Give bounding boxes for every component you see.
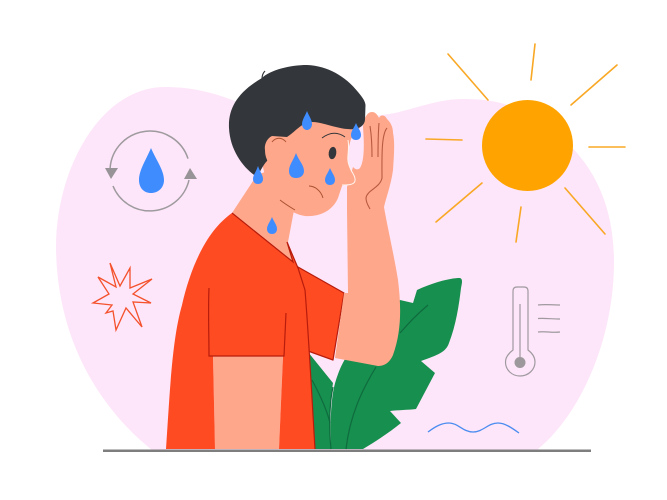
background blob xyxy=(56,87,614,450)
nose highlight xyxy=(342,140,355,185)
leaf veins xyxy=(312,305,428,449)
icon: sun xyxy=(426,44,625,242)
big leaf xyxy=(331,278,462,449)
eye xyxy=(328,146,337,160)
icon: water cycle xyxy=(105,131,197,211)
bare upper arm xyxy=(213,354,283,449)
ground line xyxy=(103,450,591,452)
man xyxy=(166,65,400,449)
shirt seams xyxy=(209,213,315,449)
icon: pain star xyxy=(93,263,152,330)
shirt sleeve raised xyxy=(298,267,344,360)
icon: thermometer xyxy=(506,287,560,376)
head xyxy=(261,111,366,216)
heat wave line xyxy=(428,423,519,433)
face details xyxy=(322,133,345,138)
hair tuft xyxy=(262,71,265,79)
ear, mouth, jaw lines xyxy=(272,138,323,210)
plant xyxy=(308,278,462,449)
raised arm and hand xyxy=(335,112,400,366)
ear xyxy=(267,134,290,163)
hair xyxy=(229,65,366,177)
shirt body xyxy=(166,213,315,449)
small leaf xyxy=(308,352,333,449)
neck xyxy=(232,170,295,262)
hand creases xyxy=(366,123,387,209)
sweat drops xyxy=(253,111,361,234)
